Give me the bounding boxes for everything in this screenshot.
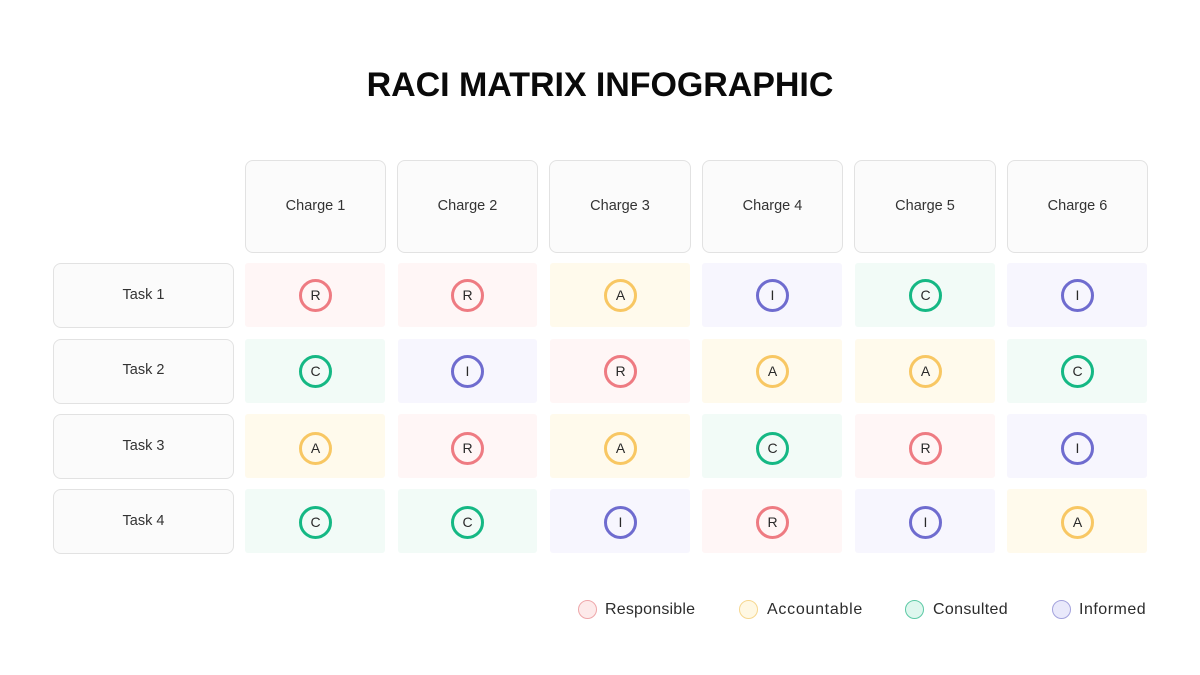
legend: Responsible (578, 600, 695, 619)
legend: Accountable: Accountable (767, 601, 863, 618)
cell: Task 3 Charge 3 A: A (616, 440, 625, 456)
cell: Task 1 Charge 4 I (702, 263, 842, 327)
title: RACI MATRIX INFOGRAPHIC (367, 66, 833, 104)
cell: Task 2 Charge 5 A (855, 339, 995, 403)
legend: Consulted: Consulted (933, 601, 1008, 618)
column header: Charge 5: Charge 5 (895, 198, 955, 214)
column header: Charge 1 (245, 160, 386, 253)
legend: Informed: Informed (1079, 601, 1146, 618)
cell: Task 3 Charge 5 R: R (920, 440, 931, 456)
cell: Task 2 Charge 6 C: C (1072, 363, 1083, 379)
cell: Task 3 Charge 4 C (702, 414, 842, 478)
cell: Task 1 Charge 6 I: I (1076, 287, 1079, 303)
cell: Task 4 Charge 5 I: I (924, 514, 927, 530)
cell: Task 4 Charge 1 C: C (310, 514, 321, 530)
cell: Task 3 Charge 3 A (550, 414, 690, 478)
cell: Task 4 Charge 2 C (398, 489, 537, 553)
legend: Responsible: Responsible (605, 601, 695, 618)
legend: Informed (1052, 600, 1146, 619)
cell: Task 2 Charge 2 I (398, 339, 537, 403)
cell: Task 2 Charge 3 R (550, 339, 690, 403)
cell: Task 2 Charge 3 R: R (615, 363, 626, 379)
cell: Task 4 Charge 5 I (855, 489, 995, 553)
cell: Task 3 Charge 6 I (1007, 414, 1147, 478)
column header: Charge 6: Charge 6 (1048, 198, 1107, 214)
legend (578, 600, 1146, 619)
cell: Task 2 Charge 6 C (1007, 339, 1147, 403)
cell: Task 4 Charge 6 A (1007, 489, 1147, 553)
cell: Task 4 Charge 3 I: I (619, 514, 622, 530)
cell: Task 3 Charge 5 R (855, 414, 995, 478)
cell: Task 1 Charge 5 C (855, 263, 995, 327)
cell: Task 4 Charge 4 R: R (767, 514, 778, 530)
row header: Task 3 (53, 414, 234, 479)
row header: Task 1: Task 1 (123, 287, 164, 303)
cell: Task 4 Charge 6 A: A (1073, 514, 1082, 530)
legend: Consulted (905, 600, 1008, 619)
cell: Task 3 Charge 2 R (398, 414, 537, 478)
column header: Charge 2: Charge 2 (438, 198, 497, 214)
row header: Task 4: Task 4 (123, 513, 164, 529)
cell: Task 3 Charge 1 A: A (311, 440, 320, 456)
cell: Task 1 Charge 5 C: C (920, 287, 931, 303)
cell: Task 2 Charge 4 A (702, 339, 842, 403)
cell: Task 1 Charge 2 R: R (462, 287, 473, 303)
cell: Task 1 Charge 6 I (1007, 263, 1147, 327)
cell: Task 1 Charge 3 A (550, 263, 690, 327)
cell: Task 1 Charge 1 R: R (310, 287, 321, 303)
column header: Charge 4 (702, 160, 843, 253)
cell: Task 3 Charge 6 I: I (1076, 440, 1079, 456)
cell: Task 2 Charge 1 C (245, 339, 385, 403)
cell: Task 3 Charge 1 A (245, 414, 385, 478)
row header: Task 3: Task 3 (123, 438, 164, 454)
cell: Task 4 Charge 3 I (550, 489, 690, 553)
column header: Charge 3 (549, 160, 691, 253)
cell: Task 1 Charge 1 R (245, 263, 385, 327)
cell: Task 2 Charge 2 I: I (466, 363, 469, 379)
cell: Task 3 Charge 2 R: R (462, 440, 473, 456)
cell: Task 3 Charge 4 C: C (767, 440, 778, 456)
cell: Task 4 Charge 1 C (245, 489, 385, 553)
column header: Charge 5 (854, 160, 996, 253)
cell: Task 4 Charge 2 C: C (462, 514, 473, 530)
cell: Task 1 Charge 2 R (398, 263, 537, 327)
cell: Task 1 Charge 3 A: A (616, 287, 625, 303)
row header: Task 2 (53, 339, 234, 404)
cell: Task 1 Charge 4 I: I (771, 287, 774, 303)
cell: Task 2 Charge 1 C: C (310, 363, 321, 379)
column header: Charge 1: Charge 1 (286, 198, 345, 214)
column header: Charge 6 (1007, 160, 1148, 253)
cell: Task 4 Charge 4 R (702, 489, 842, 553)
column header: Charge 2 (397, 160, 538, 253)
cell: Task 2 Charge 5 A: A (921, 363, 930, 379)
row header: Task 4 (53, 489, 234, 554)
column header: Charge 4: Charge 4 (743, 198, 802, 214)
cell: Task 2 Charge 4 A: A (768, 363, 777, 379)
column header: Charge 3: Charge 3 (590, 198, 650, 214)
row header: Task 2: Task 2 (123, 362, 164, 378)
row header: Task 1 (53, 263, 234, 328)
legend: Accountable (739, 600, 863, 619)
